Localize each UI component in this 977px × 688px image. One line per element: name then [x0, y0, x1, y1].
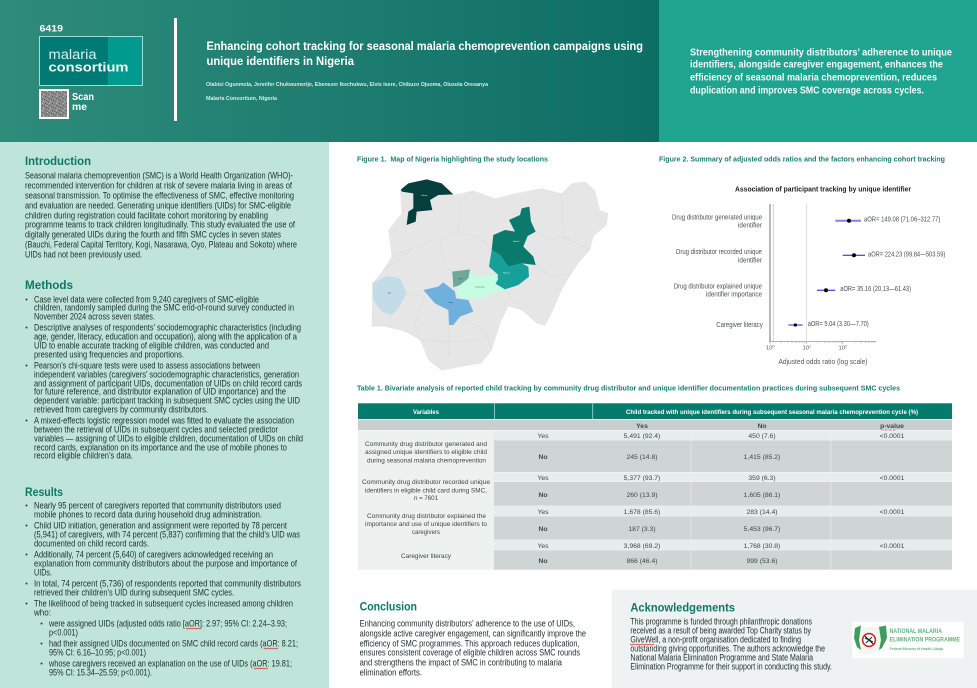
table subheader: Yes — [636, 423, 648, 430]
state labels: Plateau — [503, 271, 510, 274]
row group: generated and assigned: 1,415 (85.2) — [744, 454, 780, 461]
methods list: November 2024 across seven states. — [34, 311, 155, 321]
results list: p<0.001) — [49, 627, 78, 637]
row: generated UID: aOR= 149.08 (71.06–312.77) — [864, 217, 940, 224]
row group: caregiver literacy: 866 (46.4) — [627, 558, 657, 565]
row: generated UID — [672, 214, 940, 230]
results list: Nearly 95 percent of caregivers reported that community distributors used — [34, 500, 281, 510]
row group: recorded: <0.0001 — [880, 475, 905, 482]
row group: generated and assigned: Community drug distributor generated and — [365, 441, 487, 448]
heading: results: Results — [25, 485, 63, 499]
row group: recorded: 5,377 (93.7) — [624, 475, 660, 482]
row group: recorded: identifiers in eligible child card during SMC, — [365, 487, 487, 494]
methods list: and assignment of participant UIDs, documentation of UIDs on child record cards — [34, 378, 303, 388]
results list: Child UID initiation, generation and assignment were reported by 78 percent — [34, 520, 287, 530]
results list: explanation from community distributors about the purpose and importance of — [34, 558, 297, 568]
state: Federal Capital Territory — [452, 269, 470, 287]
conclusion text: and strengthens the impact of SMC in contributing to malaria — [360, 657, 562, 667]
row: recorded UID: Drug distributor recorded unique — [676, 249, 762, 256]
axis title: Adjusted odds ratio (log scale) — [778, 359, 868, 366]
state: Nasarawa — [456, 272, 505, 298]
introduction text: seasonal transmission. To optimise the effectiveness of SMC, effective monitoring — [25, 190, 294, 200]
logo: national malaria elimination programme: ELIMINATION PROGRAMME — [890, 636, 961, 644]
row: recorded UID: aOR= 224.23 (99.84—503.59) — [868, 252, 945, 259]
row group: explained: 187 (3.3) — [628, 526, 656, 533]
state labels: Kogi — [449, 302, 453, 304]
results list: In total, 74 percent (5,736) of respondents reported that community distributors — [34, 578, 302, 588]
axis ticks labels: 10 — [766, 346, 772, 352]
row: recorded UID — [676, 249, 945, 264]
methods list: record eligible children’s data. — [34, 450, 133, 460]
title: unique identifiers in Nigeria — [206, 54, 354, 68]
QR code — [39, 89, 69, 119]
state labels: Oyo — [388, 293, 392, 295]
table 1 — [358, 403, 952, 570]
row group: recorded — [362, 475, 905, 502]
acknowledgements text: GiveWell, a non-profit organisation dedicated to finding — [630, 634, 801, 644]
row group: generated and assigned: 245 (14.8) — [627, 454, 657, 461]
row: caregiver literacy: aOR= 5.04 (3.30—7.70) — [808, 321, 869, 328]
row: explained UID importance — [674, 283, 911, 298]
logo: malaria consortium: consortium — [48, 60, 128, 74]
row group: explained: Yes — [537, 509, 549, 516]
row group: generated and assigned: during seasonal malaria chemoprevention — [367, 457, 486, 464]
forest plot — [672, 184, 945, 366]
results list: mobile phones to record data during household drug administration. — [34, 509, 262, 519]
introduction text: programme teams to track children longitudinally. This study evaluated the use of — [25, 220, 295, 230]
state labels: FCT — [459, 279, 463, 281]
introduction text — [25, 170, 297, 259]
methods list: Descriptive analyses of respondents’ sociodemographic characteristics (including — [34, 322, 301, 332]
axis ticks labels: 1 — [809, 344, 811, 348]
table header — [358, 403, 952, 419]
scan me label: Scan — [72, 92, 94, 103]
state: Sokoto — [401, 179, 453, 225]
introduction text: Seasonal malaria chemoprevention (SMC) is a World Health Organization (WHO)- — [25, 170, 293, 180]
authors: Olabisi Ogunmola, Jennifer Chukwumerije, Ebenezer Ikechukwu, Elvis Isere, Chibuzo Ojuoma, Olusola Oresanya — [206, 82, 488, 88]
conclusion text: Enhancing community distributors’ adherence to the use of UIDs, — [360, 618, 575, 628]
row group: explained: caregivers — [412, 529, 441, 536]
results list: documented on child record cards. — [34, 538, 149, 548]
axis ticks labels: 0 — [772, 344, 774, 348]
table header: Variables — [413, 409, 439, 416]
row group: generated and assigned: <0.0001 — [880, 433, 905, 440]
row: caregiver literacy — [716, 321, 869, 329]
row group: caregiver literacy: Yes — [537, 543, 549, 550]
results list: UIDs. — [34, 567, 52, 577]
results list: whose caregivers received an explanation on the use of UIDs (aOR: 19.81; — [48, 658, 292, 668]
table subheader: No — [757, 423, 767, 430]
row group: caregiver literacy: <0.0001 — [880, 543, 905, 550]
row: explained UID importance: Drug distributor explained unique — [674, 283, 762, 290]
introduction text: children during registration could facilitate cohort monitoring by enabling — [25, 210, 268, 220]
methods list: age, gender, literacy, education and occupation), along with the application of a — [34, 331, 297, 341]
row group: recorded: n = 7601 — [414, 495, 438, 502]
results list — [26, 500, 302, 677]
axis ticks labels — [766, 344, 847, 352]
state: Plateau — [489, 250, 529, 289]
introduction text: UIDs had not been previously used. — [25, 249, 142, 259]
logo: national malaria elimination programme — [852, 622, 964, 658]
row: generated UID: identifier — [738, 222, 763, 230]
methods list: variables — assigning of UIDs to eligible children, documentation of UIDs on child — [34, 433, 303, 443]
axis ticks labels: 2 — [845, 344, 847, 348]
heading: conclusion: Conclusion — [360, 600, 417, 614]
scan me label: me — [72, 102, 87, 113]
state labels — [388, 194, 520, 304]
row group: recorded: 359 (6.3) — [748, 475, 776, 482]
map base — [372, 179, 608, 371]
row group: explained: 1,678 (85.6) — [624, 509, 660, 516]
state: Kogi — [423, 282, 473, 325]
row group: explained: importance and use of unique identifiers to — [365, 521, 487, 528]
row group: recorded: No — [538, 492, 548, 499]
introduction text: digitally generated UIDs during the fourth and fifth SMC cycles in seven states — [25, 229, 281, 239]
row group: caregiver literacy: 3,968 (69.2) — [624, 543, 660, 550]
row group: generated and assigned: No — [538, 454, 548, 461]
state labels: Nasarawa — [476, 286, 485, 289]
figure 1 caption: Figure 1. Map of Nigeria highlighting the study locations — [357, 154, 548, 164]
methods list: Case level data were collected from 9,240 caregivers of SMC-eligible — [34, 294, 259, 304]
methods list: A mixed-effects logistic regression model was fitted to evaluate the association — [34, 415, 294, 425]
title — [206, 39, 643, 68]
results list: 95% CI: 15.34–25.59; p<0.001). — [49, 667, 152, 677]
axis ticks labels: 10 — [802, 346, 809, 352]
introduction text: (Bauchi, Federal Capital Territory, Kogi, Nasarawa, Oyo, Plateau and Sokoto) where — [25, 239, 297, 249]
methods list: for future reference, and distributor explanation of UID importance) and the — [34, 387, 286, 397]
results list: had their assigned UIDs documented on SMC child record cards (aOR: 8.21; — [49, 638, 298, 648]
row: caregiver literacy: Caregiver literacy — [716, 322, 763, 329]
conclusion text: ensures consistent coverage of eligible children across SMC rounds — [360, 648, 580, 658]
results list: The likelihood of being tracked in subsequent cycles increased among children — [34, 598, 293, 608]
row: recorded UID: identifier — [738, 257, 763, 264]
scan me label — [72, 92, 94, 113]
row group: recorded: 1,605 (86.1) — [744, 492, 780, 499]
row group: generated and assigned — [365, 433, 905, 464]
conclusion text: alongside active caregiver engagement, can significantly improve the — [360, 628, 586, 638]
table caption: Table 1. Bivariate analysis of reported child tracking by community drug distributor and unique identifier documentation practices during subsequent SMC cycles — [357, 383, 900, 392]
table subheader — [358, 420, 952, 431]
methods list — [26, 294, 303, 460]
methods list: retrieved from caregivers by community distributors. — [34, 404, 208, 414]
icon: Nigeria flag shape — [854, 626, 887, 655]
table subheader: p-value — [880, 423, 904, 430]
state: Oyo — [372, 276, 407, 315]
results list: Additionally, 74 percent (5,640) of caregivers acknowledged receiving an — [34, 549, 273, 559]
results list: who: — [33, 607, 51, 617]
row: explained UID importance: identifier importance — [706, 291, 762, 298]
row group: recorded: Community drug distributor recorded unique — [362, 479, 490, 486]
logo: malaria consortium — [40, 36, 142, 86]
results list: 95% CI: 6.16–10.95; p<0.001) — [49, 647, 146, 657]
acknowledgements text: outstanding giving opportunities. The authors acknowledge the — [630, 643, 825, 653]
state: Bauchi — [492, 207, 536, 267]
acknowledgements text: National Malaria Elimination Programme and State Malaria — [630, 653, 813, 663]
panel: key message: Strengthening community distributors’ adherence to unique — [690, 48, 952, 58]
state labels: Sokoto — [421, 194, 428, 197]
row group: caregiver literacy: 999 (53.6) — [747, 558, 777, 565]
table header: Child tracked with unique identifiers during subsequent seasonal malaria chemoprevention cycle (%) — [626, 409, 918, 416]
row group: recorded: Yes — [537, 475, 549, 482]
row: generated UID: Drug distributor generated unique — [672, 214, 762, 222]
row group: explained — [365, 509, 905, 536]
methods list: dependent variable: participant tracking in subsequent SMC cycles using the UID — [34, 396, 300, 406]
heading: methods: Methods — [25, 278, 73, 292]
results list: were assigned UIDs (adjusted odds ratio [aOR]: 2.97; 95% CI: 2.24–3.93; — [48, 618, 287, 628]
heading: introduction: Introduction — [25, 154, 91, 168]
methods list: UID to enable accurate tracking of eligible children, was conducted and — [34, 340, 269, 350]
row group: explained: No — [538, 526, 548, 533]
panel: key message: duplication and improves SMC coverage across cycles. — [690, 86, 924, 96]
map of Nigeria — [372, 179, 608, 371]
introduction text: and evaluation are needed. Generating unique identifiers (UIDs) for SMC-eligible — [25, 200, 291, 210]
acknowledgements text: Elimination Programme for their support in conducting this study. — [630, 662, 832, 672]
row group: explained: 5,453 (96.7) — [744, 526, 780, 533]
logo: malaria consortium: malaria — [48, 47, 97, 62]
methods list: between the retrieval of UIDs in subsequent cycles and selected predictor — [34, 424, 278, 434]
row group: caregiver literacy: Caregiver literacy — [401, 553, 452, 560]
methods list: Pearson’s chi-square tests were used to assess associations between — [34, 360, 260, 370]
logo: national malaria elimination programme: Federal Ministry of Health, Abuja — [890, 647, 944, 651]
methods list: children, randomly sampled during the SMC end-of-round survey conducted in — [34, 303, 294, 313]
panel: acknowledgements — [612, 590, 977, 688]
acknowledgements text: This programme is funded through philanthropic donations — [630, 616, 812, 626]
title: Enhancing cohort tracking for seasonal malaria chemoprevention campaigns using — [206, 39, 643, 53]
methods list: record cards, explanation on its importance and the use of mobile phones to — [34, 442, 287, 452]
row group: explained: 283 (14.4) — [747, 509, 777, 516]
row group: caregiver literacy — [401, 543, 905, 565]
panel: key message — [659, 0, 977, 142]
introduction text: recommended intervention for children at risk of severe malaria living in areas of — [25, 180, 292, 190]
poster number: 6419 — [40, 24, 63, 34]
conclusion text — [360, 618, 586, 677]
methods list: independent variables (caregivers’ sociodemographic characteristics, generation — [34, 369, 299, 379]
panel: left column — [0, 142, 329, 688]
row group: generated and assigned: Yes — [537, 433, 549, 440]
panel: key message: efficiency of seasonal malaria chemoprevention, reduces — [690, 72, 937, 84]
header band — [0, 0, 659, 142]
results list: retrieved their children’s UID during subsequent SMC cycles. — [34, 587, 234, 597]
methods list: presented using frequencies and proportions. — [34, 349, 184, 359]
row group: recorded: 260 (13.9) — [627, 492, 657, 499]
row group: caregiver literacy: No — [538, 558, 548, 565]
logo: national malaria elimination programme: NATIONAL MALARIA — [890, 628, 942, 635]
row group: caregiver literacy: 1,768 (30.8) — [744, 543, 780, 550]
row group: generated and assigned: assigned unique identifiers to eligible child — [365, 449, 487, 456]
row group: explained: Community drug distributor explained the — [367, 513, 486, 520]
conclusion text: elimination efforts. — [360, 667, 422, 677]
acknowledgements text: received as a result of being awarded Top Charity status by — [630, 625, 811, 635]
table row backgrounds — [358, 430, 952, 570]
acknowledgements text — [630, 616, 832, 672]
conclusion text: efficiency of SMC programmes. This approach reduces duplication, — [360, 638, 580, 648]
state labels: Bauchi — [513, 241, 520, 243]
chart title: Association of participant tracking by unique identifier — [735, 184, 911, 194]
row: explained UID importance: aOR= 35.16 (20.13—61.43) — [840, 286, 911, 293]
row group: explained: <0.0001 — [880, 509, 905, 516]
panel: key message: identifiers, alongside caregiver engagement, enhances the — [690, 60, 943, 70]
results list: (5,941) of caregivers, with 74 percent (5,837) confirming that the child’s UID was — [34, 529, 301, 539]
axis ticks labels: 10 — [838, 346, 845, 352]
row group: generated and assigned: 450 (7.6) — [748, 433, 776, 440]
heading: acknowledgements: Acknowledgements — [630, 600, 735, 614]
icon: no mosquito — [863, 634, 875, 646]
affiliation: Malaria Consortium, Nigeria — [206, 96, 277, 102]
figure 2 caption: Figure 2. Summary of adjusted odds ratios and the factors enhancing cohort tracking — [659, 154, 945, 164]
row group: generated and assigned: 5,491 (92.4) — [624, 433, 660, 440]
